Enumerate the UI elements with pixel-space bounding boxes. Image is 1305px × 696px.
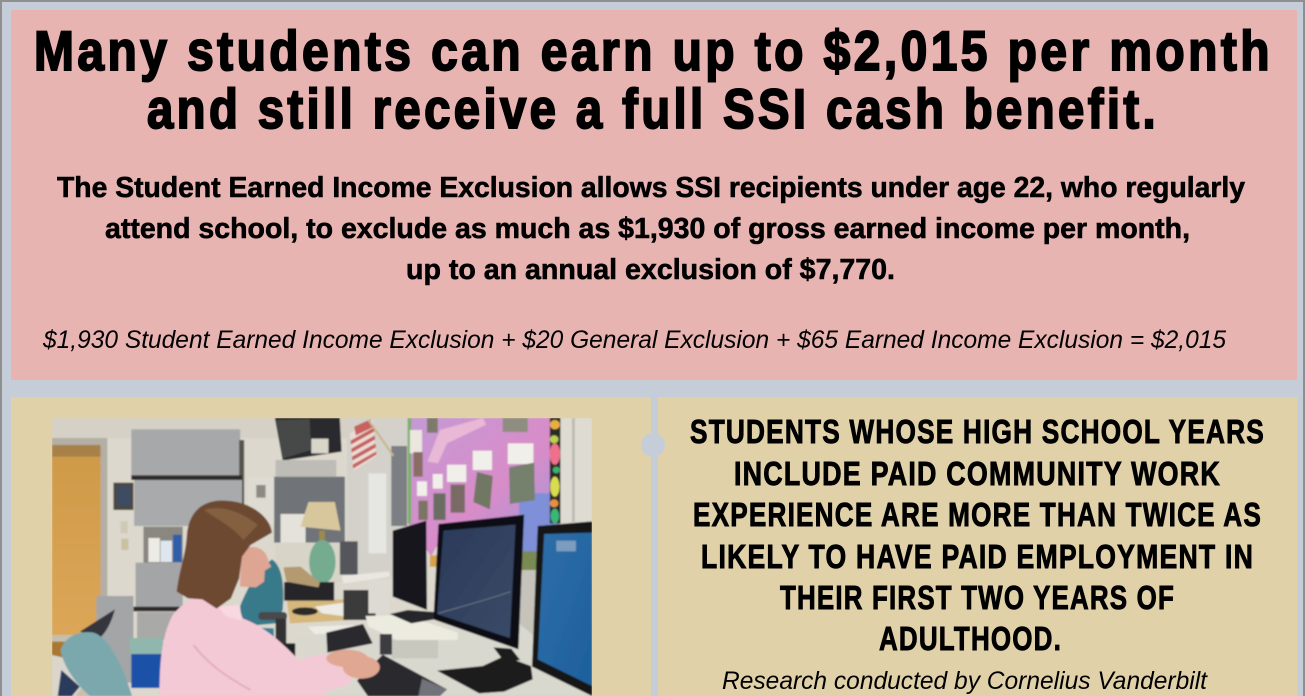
source credit: Research conducted by Cornelius Vanderbilt	[722, 667, 1208, 695]
panel: bottom right statistic panel	[658, 397, 1297, 696]
flag	[350, 419, 376, 471]
description text: up to an annual exclusion of $7,770.	[406, 254, 895, 286]
student	[160, 501, 380, 696]
front chairs	[80, 609, 115, 637]
title	[34, 19, 1273, 140]
panel: top pink	[11, 10, 1297, 380]
statistic heading: THEIR FIRST TWO YEARS OF	[780, 579, 1175, 616]
connector dot	[641, 433, 665, 457]
panel: bottom left photo panel	[11, 397, 651, 696]
right monitor	[532, 521, 592, 696]
statistic heading: ADULTHOOD.	[879, 620, 1062, 657]
description text: attend school, to exclude as much as $1,930 of gross earned income per month,	[105, 213, 1190, 245]
statistic heading	[690, 413, 1265, 657]
formula: $1,930 Student Earned Income Exclusion + $20 General Exclusion + $65 Earned Income Exclusion = $2,015	[42, 326, 1226, 354]
small monitor	[393, 521, 427, 610]
description text	[57, 172, 1245, 286]
desk foreground	[465, 624, 540, 687]
border dots	[550, 418, 561, 523]
middle monitor	[433, 515, 533, 693]
paper letters and photos	[410, 418, 535, 520]
photo: student at computer	[52, 418, 592, 696]
teal office chair	[240, 559, 283, 627]
front keyboard	[357, 655, 447, 696]
description text: The Student Earned Income Exclusion allows SSI recipients under age 22, who regularly	[57, 172, 1245, 204]
